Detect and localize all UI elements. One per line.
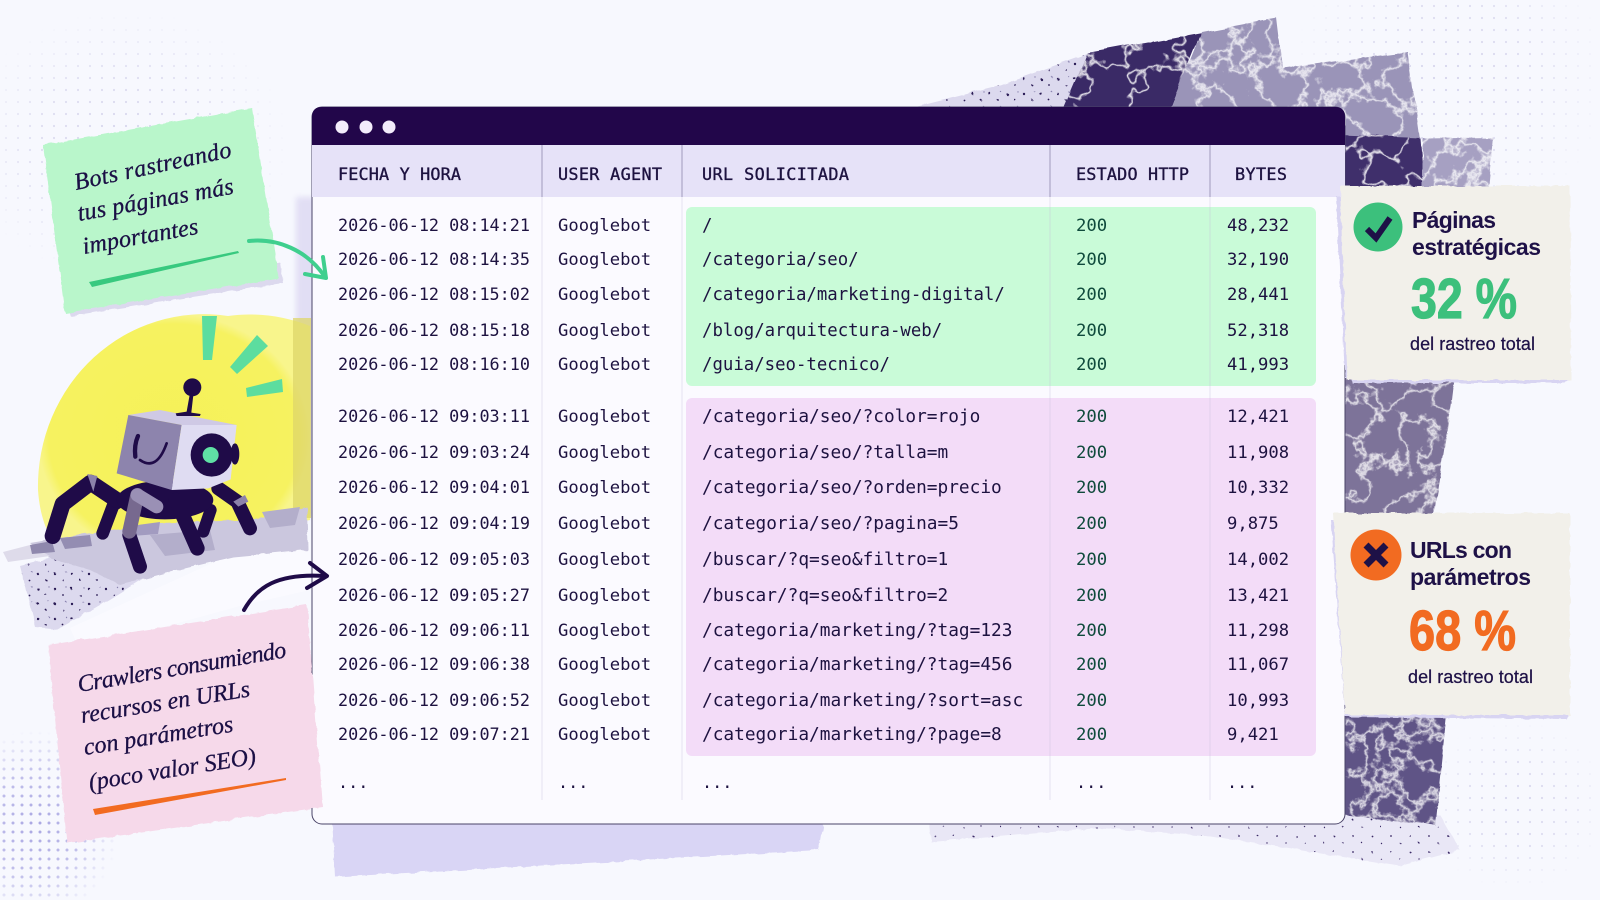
- card title: parámetros: [1410, 564, 1531, 590]
- yellow sun circle: [38, 314, 311, 560]
- green spark marks: [202, 316, 283, 397]
- rows: parameter urls: 12,421: [1227, 407, 1289, 427]
- rows: strategic pages: /blog/arquitectura-web/: [702, 321, 942, 341]
- rows: strategic pages: /: [702, 216, 712, 236]
- panel: log window: [312, 107, 1345, 824]
- rows: strategic pages: 48,232: [1227, 216, 1289, 236]
- rows: ellipsis: ...: [702, 772, 732, 792]
- dark veined paper top: [1062, 32, 1202, 112]
- rows: parameter urls: 200: [1076, 691, 1107, 711]
- card value: 32 %: [1411, 267, 1517, 331]
- rows: parameter urls: 13,421: [1227, 586, 1289, 606]
- rows: parameter urls: /categoria/marketing/?sort=asc: [702, 690, 1023, 711]
- rocky ground: [3, 507, 310, 650]
- rows: ellipsis: ...: [1076, 772, 1106, 792]
- table header labels: FECHA Y HORA: [338, 164, 461, 184]
- card value: 68 %: [1409, 599, 1516, 663]
- rows: ellipsis: [338, 772, 1257, 792]
- pink highlight: parameter rows: [686, 398, 1316, 756]
- table header band: [312, 145, 1345, 197]
- rows: strategic pages: 2026-06-12 08:15:18: [338, 320, 530, 340]
- rows: parameter urls: [338, 406, 1289, 745]
- rows: strategic pages: Googlebot: [558, 250, 651, 270]
- rows: parameter urls: 14,002: [1227, 550, 1289, 570]
- rows: strategic pages: Googlebot: [558, 285, 651, 305]
- robot body: [117, 481, 213, 519]
- rows: parameter urls: Googlebot: [558, 655, 651, 675]
- card shadow: [1331, 520, 1570, 719]
- left fading rock: [3, 545, 50, 562]
- rock accents: [30, 541, 55, 554]
- note text: [76, 637, 288, 796]
- rows: parameter urls: 11,908: [1227, 443, 1289, 463]
- arrow: dark to parameter rows: [244, 563, 327, 610]
- rows: parameter urls: /buscar/?q=seo&filtro=2: [702, 585, 948, 606]
- rows: parameter urls: /categoria/seo/?color=rojo: [702, 406, 980, 427]
- collage: torn paper behind the window: [296, 18, 1493, 877]
- rows: parameter urls: 200: [1076, 655, 1107, 675]
- table header labels: URL SOLICITADA: [702, 164, 849, 184]
- rows: parameter urls: 200: [1076, 621, 1107, 641]
- rows: parameter urls: 2026-06-12 09:05:27: [338, 585, 530, 605]
- rows: strategic pages: 200: [1076, 216, 1107, 236]
- card title: [1410, 537, 1531, 590]
- rows: strategic pages: 52,318: [1227, 321, 1289, 341]
- window body: [312, 107, 1345, 824]
- rows: strategic pages: Googlebot: [558, 355, 651, 375]
- rows: parameter urls: 2026-06-12 09:06:38: [338, 654, 530, 674]
- white torn band: [70, 540, 310, 650]
- veined strip beside the first card: [1340, 375, 1455, 520]
- note paper: [48, 605, 323, 843]
- robot head: [117, 410, 239, 490]
- rows: strategic pages: 200: [1076, 250, 1107, 270]
- rows: parameter urls: /categoria/seo/?talla=m: [702, 442, 948, 463]
- sticky note: pink: [48, 605, 323, 843]
- rows: parameter urls: 200: [1076, 725, 1107, 745]
- rows: parameter urls: /categoria/marketing/?page=8: [702, 724, 1002, 745]
- note underline: [93, 778, 286, 815]
- table header labels: BYTES: [1235, 164, 1287, 184]
- table header labels: USER AGENT: [558, 164, 662, 184]
- grey veined paper top: [1170, 18, 1420, 140]
- card paper: [1333, 513, 1570, 715]
- note text: Crawlers consumiendo: [76, 637, 288, 698]
- rows: parameter urls: 2026-06-12 09:07:21: [338, 724, 530, 744]
- card title: estratégicas: [1412, 234, 1541, 260]
- card title: Páginas: [1412, 207, 1496, 233]
- rows: parameter urls: 10,993: [1227, 691, 1289, 711]
- rows: parameter urls: 2026-06-12 09:03:11: [338, 406, 530, 426]
- sticky note: green: [43, 108, 283, 316]
- dotted paper bottom right: [928, 815, 1460, 866]
- rows: parameter urls: /categoria/seo/?orden=precio: [702, 477, 1002, 498]
- rows: parameter urls: Googlebot: [558, 586, 651, 606]
- rows: strategic pages: 2026-06-12 08:16:10: [338, 354, 530, 374]
- icon: cross: [1350, 530, 1402, 580]
- rows: parameter urls: 2026-06-12 09:05:03: [338, 549, 530, 569]
- table header labels: [338, 164, 1287, 184]
- panel: strategic pages stat card: [1336, 186, 1571, 383]
- grey rocks: [30, 507, 308, 585]
- panel: parameter urls stat card: [1331, 513, 1570, 719]
- rows: parameter urls: 11,067: [1227, 655, 1289, 675]
- rows: parameter urls: 200: [1076, 514, 1107, 534]
- note paper: [43, 108, 279, 313]
- note text: importantes: [81, 214, 200, 260]
- card paper: [1340, 186, 1571, 380]
- rows: parameter urls: 9,421: [1227, 725, 1279, 745]
- rows: parameter urls: 10,332: [1227, 478, 1289, 498]
- rows: strategic pages: 2026-06-12 08:14:35: [338, 249, 530, 269]
- rows: parameter urls: Googlebot: [558, 621, 651, 641]
- rows: strategic pages: 28,441: [1227, 285, 1289, 305]
- rows: ellipsis: ...: [558, 772, 588, 792]
- rows: parameter urls: Googlebot: [558, 407, 651, 427]
- rows: parameter urls: 9,875: [1227, 514, 1279, 534]
- note underline: [89, 251, 239, 287]
- rows: strategic pages: [338, 215, 1289, 375]
- rows: parameter urls: Googlebot: [558, 514, 651, 534]
- note text: con parámetros: [82, 712, 235, 761]
- rows: strategic pages: 41,993: [1227, 355, 1289, 375]
- rows: parameter urls: Googlebot: [558, 478, 651, 498]
- rows: strategic pages: 200: [1076, 321, 1107, 341]
- speckled ground: [20, 530, 250, 630]
- robot legs front: [129, 495, 197, 567]
- card shadow: [1336, 196, 1570, 383]
- table header labels: ESTADO HTTP: [1076, 164, 1189, 184]
- card caption: del rastreo total: [1410, 334, 1535, 354]
- veined strip below the second card: [1340, 710, 1447, 825]
- rows: parameter urls: 200: [1076, 407, 1107, 427]
- robot antenna: [176, 378, 201, 416]
- rows: strategic pages: Googlebot: [558, 216, 651, 236]
- rows: parameter urls: 2026-06-12 09:06:11: [338, 620, 530, 640]
- rows: parameter urls: /categoria/marketing/?tag=123: [702, 620, 1012, 641]
- icon: check: [1354, 202, 1402, 252]
- rows: parameter urls: Googlebot: [558, 725, 651, 745]
- rows: parameter urls: 11,298: [1227, 621, 1289, 641]
- rows: parameter urls: Googlebot: [558, 691, 651, 711]
- rows: parameter urls: 2026-06-12 09:06:52: [338, 690, 530, 710]
- rows: parameter urls: Googlebot: [558, 443, 651, 463]
- rows: parameter urls: 2026-06-12 09:04:01: [338, 477, 530, 497]
- note text: [72, 137, 236, 260]
- rows: strategic pages: Googlebot: [558, 321, 651, 341]
- rows: parameter urls: /buscar/?q=seo&filtro=1: [702, 549, 948, 570]
- rows: parameter urls: 200: [1076, 443, 1107, 463]
- lavender strip left of window: [296, 197, 316, 517]
- title bar: [312, 107, 1345, 145]
- rows: strategic pages: 2026-06-12 08:14:21: [338, 215, 530, 235]
- window control dots: [336, 120, 396, 134]
- rows: strategic pages: 2026-06-12 08:15:02: [338, 284, 530, 304]
- arrow: green to strategic rows: [249, 241, 326, 278]
- rows: parameter urls: 200: [1076, 586, 1107, 606]
- rows: parameter urls: 2026-06-12 09:03:24: [338, 442, 530, 462]
- rows: strategic pages: 32,190: [1227, 250, 1289, 270]
- note text: Bots rastreando: [72, 137, 234, 196]
- rows: parameter urls: 2026-06-12 09:04:19: [338, 513, 530, 533]
- green highlight: strategic rows: [686, 207, 1316, 386]
- rows: strategic pages: /categoria/seo/: [702, 250, 859, 270]
- lavender paper bottom left: [332, 815, 825, 877]
- note shadow: [65, 262, 283, 316]
- dark veined paper right: [1340, 135, 1424, 190]
- icon: spider robot mascot: [53, 378, 250, 567]
- card title: [1412, 207, 1541, 260]
- rows: strategic pages: /guia/seo-tecnico/: [702, 355, 890, 375]
- rows: parameter urls: 200: [1076, 478, 1107, 498]
- rows: parameter urls: /categoria/marketing/?tag=456: [702, 654, 1012, 675]
- rows: ellipsis: ...: [338, 772, 368, 792]
- dotted paper top: [913, 53, 1090, 112]
- note text: recursos en URLs: [79, 676, 252, 729]
- rows: ellipsis: ...: [1227, 772, 1257, 792]
- robot legs back: [53, 483, 250, 536]
- robot joints: [87, 474, 97, 492]
- rows: strategic pages: /categoria/marketing-digital/: [702, 285, 1005, 305]
- rows: parameter urls: /categoria/seo/?pagina=5: [702, 513, 959, 534]
- shaded strip of sun near window: [293, 318, 311, 518]
- rows: strategic pages: 200: [1076, 355, 1107, 375]
- card title: URLs con: [1410, 537, 1512, 563]
- rows: strategic pages: 200: [1076, 285, 1107, 305]
- rows: parameter urls: 200: [1076, 550, 1107, 570]
- card caption: del rastreo total: [1408, 667, 1533, 687]
- note text: (poco valor SEO): [87, 744, 258, 796]
- rows: parameter urls: Googlebot: [558, 550, 651, 570]
- grey veined paper right: [1422, 137, 1493, 190]
- note text: tus páginas más: [76, 174, 236, 227]
- column separators: [542, 145, 1210, 800]
